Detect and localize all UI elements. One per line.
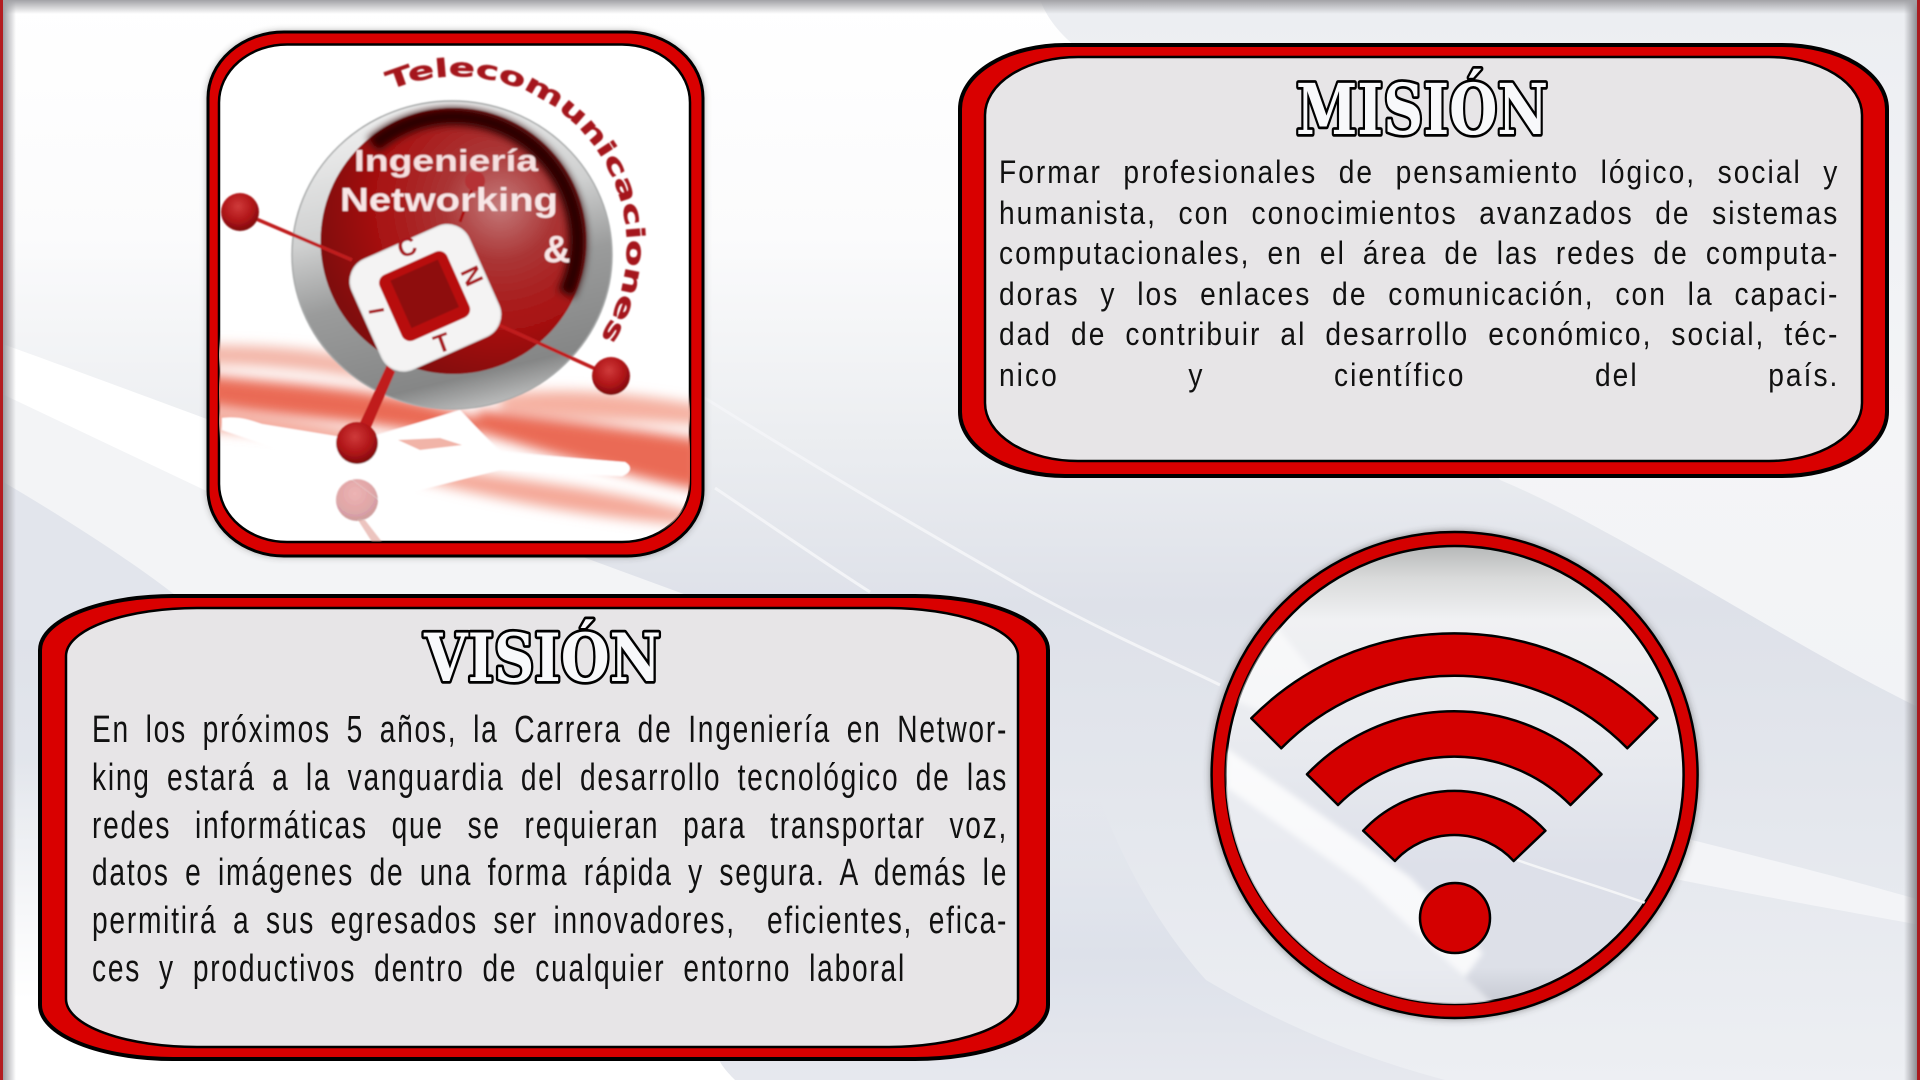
visión text: king estará a la vanguardia del desarrollo tecnológico de las xyxy=(92,757,1008,799)
visión frame xyxy=(40,596,1048,1059)
panel: misión xyxy=(958,43,1889,478)
disc dark crescent xyxy=(373,116,578,294)
icon: wifi badge xyxy=(1206,526,1704,1024)
misión text: dad de contribuir al desarrollo económico, social, téc- xyxy=(999,316,1839,352)
heading: visión: VISIÓN xyxy=(423,619,661,697)
misión text xyxy=(999,154,1839,393)
reflected ball xyxy=(336,479,378,521)
wifi arc: small xyxy=(1363,791,1545,861)
logo illustration: & xyxy=(543,229,570,271)
red disc xyxy=(320,108,586,374)
square letters xyxy=(368,236,484,353)
logo image area xyxy=(219,44,690,542)
visión text: ces y productivos dentro de cualquier entorno laboral xyxy=(92,948,906,990)
visión text xyxy=(92,709,1008,990)
misión text: doras y los enlaces de comunicación, con la capaci- xyxy=(999,276,1839,312)
badge face xyxy=(1226,546,1684,1004)
ICTN square xyxy=(348,222,503,373)
square letters: C xyxy=(393,230,421,264)
rods xyxy=(256,217,596,371)
square letters: I xyxy=(364,306,389,316)
square letters: T xyxy=(429,326,455,360)
square letters: N xyxy=(454,261,490,291)
red streaks xyxy=(205,345,700,525)
misión frame xyxy=(960,45,1887,476)
visión text: datos e imágenes de una forma rápida y segura. A demás le xyxy=(92,852,1008,894)
misión text: nico y científico del país. xyxy=(999,357,1839,393)
white platform xyxy=(222,410,630,500)
wifi arc: large xyxy=(1251,633,1657,748)
balls xyxy=(221,193,259,231)
visión text: permitirá a sus egresados ser innovadores, eficientes, efica- xyxy=(92,900,1008,942)
misión text: computacionales, en el área de las redes de computa- xyxy=(999,235,1839,271)
small top node xyxy=(460,171,485,222)
misión text: Formar profesionales de pensamiento lógico, social y xyxy=(999,154,1839,190)
badge shadow xyxy=(1211,531,1699,1019)
panel: visión xyxy=(38,594,1050,1061)
platform diamond xyxy=(398,438,462,450)
visión text: redes informáticas que se requieran para transportar voz, xyxy=(92,805,1008,847)
heading: misión: MISIÓN xyxy=(1296,68,1548,151)
wifi arc: medium xyxy=(1307,711,1602,805)
visión text: En los próximos 5 años, la Carrera de Ingeniería en Networ- xyxy=(92,709,1008,751)
badge ring xyxy=(1212,532,1698,1018)
silver ring xyxy=(292,101,612,409)
panel shadow xyxy=(208,32,703,556)
panel frame xyxy=(208,32,703,556)
face swooshes xyxy=(1200,625,1651,1010)
curved title xyxy=(390,76,627,352)
wifi dot xyxy=(1420,883,1490,953)
logo illustration xyxy=(219,56,690,542)
logo illustration: Networking xyxy=(340,181,558,218)
logo illustration: Telecomunicaciones xyxy=(382,56,647,343)
misión text: humanista, con conocimientos avanzados de sistemas xyxy=(999,195,1839,231)
logo text: Ingeniería xyxy=(354,143,539,178)
panel: logo xyxy=(202,26,708,562)
